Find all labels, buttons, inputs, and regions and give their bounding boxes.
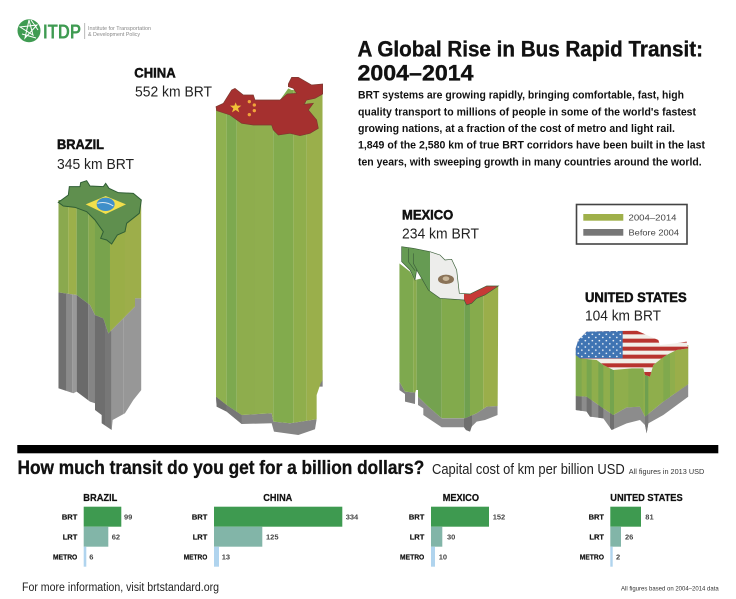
bar chart: China: LRT [193, 532, 208, 541]
label: Mexico: MEXICO [402, 206, 453, 222]
map: Mexico flag [401, 246, 500, 306]
bar chart: Mexico: BRT [409, 512, 425, 521]
map: US flag [573, 330, 690, 378]
label: China: CHINA [134, 65, 176, 81]
label: Mexico: 234 km BRT [402, 226, 479, 242]
label: United States: 104 km BRT [585, 309, 661, 325]
section heading: How much transit do you get for a billion dollars? [18, 457, 424, 479]
intro text block: ten years, with sweeping growth in many countries around the world. [358, 157, 702, 169]
bar chart: Brazil: LRT [63, 532, 78, 541]
label: Mexico [402, 206, 479, 242]
column: Mexico [397, 243, 501, 433]
section subheading: Capital cost of km per billion USD [432, 462, 625, 478]
bar chart: United States: 26 [625, 532, 633, 541]
intro text block: 1,849 of the 2,580 km of true BRT corridors have been built in the last [358, 140, 705, 152]
bar chart: Mexico: 10 [439, 552, 447, 561]
bar chart: Brazil: 99 [124, 512, 132, 521]
section note: All figures in 2013 USD [629, 467, 705, 476]
map: China flag [216, 77, 323, 136]
column: China [213, 77, 327, 437]
icon: ITDP star wheel [18, 19, 40, 42]
bar chart: Mexico: 152 [493, 512, 505, 521]
logo wordmark: ITDP [43, 21, 81, 43]
bar chart: Mexico: LRT [410, 532, 425, 541]
intro text block: BRT systems are growing rapidly, bringing comfortable, fast, high [358, 89, 684, 101]
column: United States [573, 330, 690, 437]
bar chart: China: 334 [346, 512, 359, 521]
logo: ITDP [18, 19, 151, 43]
label: United States: UNITED STATES [585, 289, 687, 305]
bar chart: Mexico: 30 [447, 532, 455, 541]
column: Brazil [58, 181, 142, 433]
bar chart: Brazil: BRAZIL [83, 492, 118, 504]
label: China: 552 km BRT [135, 85, 212, 101]
legend: Before 2004 [628, 228, 679, 238]
bar chart: Brazil: METRO [53, 552, 77, 561]
bar chart: United States: BRT [589, 512, 604, 521]
label: Brazil [57, 136, 134, 173]
bar chart: China: METRO [184, 552, 207, 561]
bar chart: Brazil: 6 [89, 552, 93, 561]
label: Brazil: BRAZIL [57, 136, 104, 152]
bar chart: China: BRT [192, 512, 208, 521]
legend: 2004–2014 [628, 212, 677, 222]
bar chart: United States: UNITED STATES [610, 492, 683, 504]
logo tagline: & Development Policy [88, 32, 140, 38]
title: 2004–2014 [358, 61, 474, 86]
footer link text: For more information, visit brtstandard.org [22, 582, 219, 594]
bar chart: United States: 2 [616, 552, 620, 561]
label: China [134, 65, 212, 101]
bar chart: Mexico: METRO [400, 552, 424, 561]
bar chart: Brazil [53, 492, 132, 567]
intro text block: growing nations, at a fraction of the cost of metro and light rail. [358, 123, 675, 135]
logo tagline: Institute for Transportation [88, 26, 151, 32]
bar chart: Brazil: BRT [62, 512, 78, 521]
bar chart: China: 13 [222, 552, 230, 561]
bar chart: Mexico [400, 492, 505, 567]
title [358, 37, 703, 86]
logo tagline [88, 26, 151, 38]
bar chart: United States: 81 [645, 512, 654, 521]
bar chart: United States: LRT [589, 532, 604, 541]
bar chart: United States: METRO [580, 552, 604, 561]
footer note: All figures based on 2004–2014 data [621, 586, 719, 593]
label: Brazil: 345 km BRT [57, 157, 134, 173]
map: Brazil flag [58, 181, 141, 244]
bar chart: China: 125 [266, 532, 279, 541]
bar chart: United States [580, 492, 683, 567]
bar chart: China [184, 492, 359, 567]
intro text block [358, 89, 705, 169]
divider bar [17, 445, 718, 453]
label: United States [585, 289, 687, 325]
title: A Global Rise in Bus Rapid Transit: [358, 37, 703, 62]
bar chart: Brazil: 62 [112, 532, 120, 541]
bar chart: Mexico: MEXICO [443, 492, 479, 504]
intro text block: quality transport to millions of people in some of the world's fastest [358, 106, 696, 118]
bar chart: China: CHINA [263, 492, 293, 504]
legend [576, 204, 687, 244]
